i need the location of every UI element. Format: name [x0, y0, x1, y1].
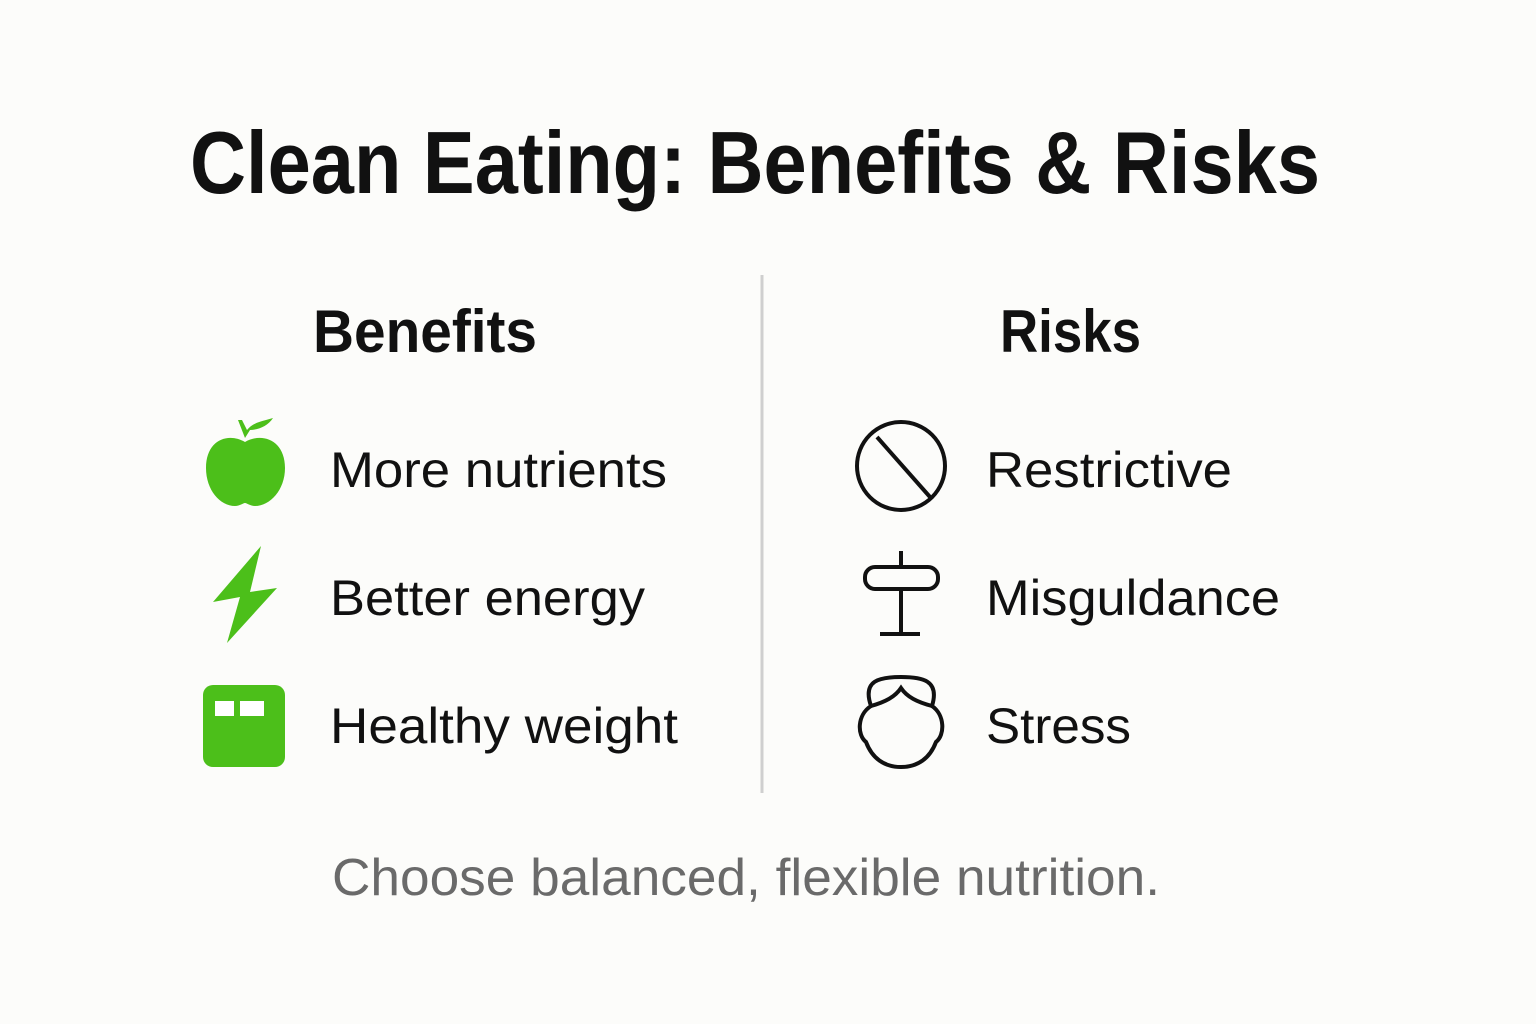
text: healthy weight: Healthy weight — [330, 698, 678, 754]
heading: benefits: Benefits — [313, 298, 537, 365]
panel: benefits — [203, 298, 678, 767]
icon: scale — [203, 685, 285, 767]
text: more nutrients: More nutrients — [330, 442, 667, 498]
panel: risks — [857, 298, 1280, 767]
footer text: Choose balanced, flexible nutrition. — [332, 849, 1160, 907]
icon: lightning — [213, 546, 277, 643]
icon: apple — [206, 418, 285, 506]
icon: signpost — [865, 551, 938, 634]
text: restrictive: Restrictive — [986, 442, 1232, 498]
text: better energy: Better energy — [330, 570, 645, 626]
icon: head — [860, 677, 942, 767]
icon: prohibited — [857, 422, 945, 510]
title: Clean Eating: Benefits & Risks — [190, 113, 1320, 212]
heading: risks: Risks — [1000, 298, 1141, 365]
text: stress: Stress — [986, 698, 1131, 754]
text: misguidance: Misguldance — [986, 570, 1280, 626]
